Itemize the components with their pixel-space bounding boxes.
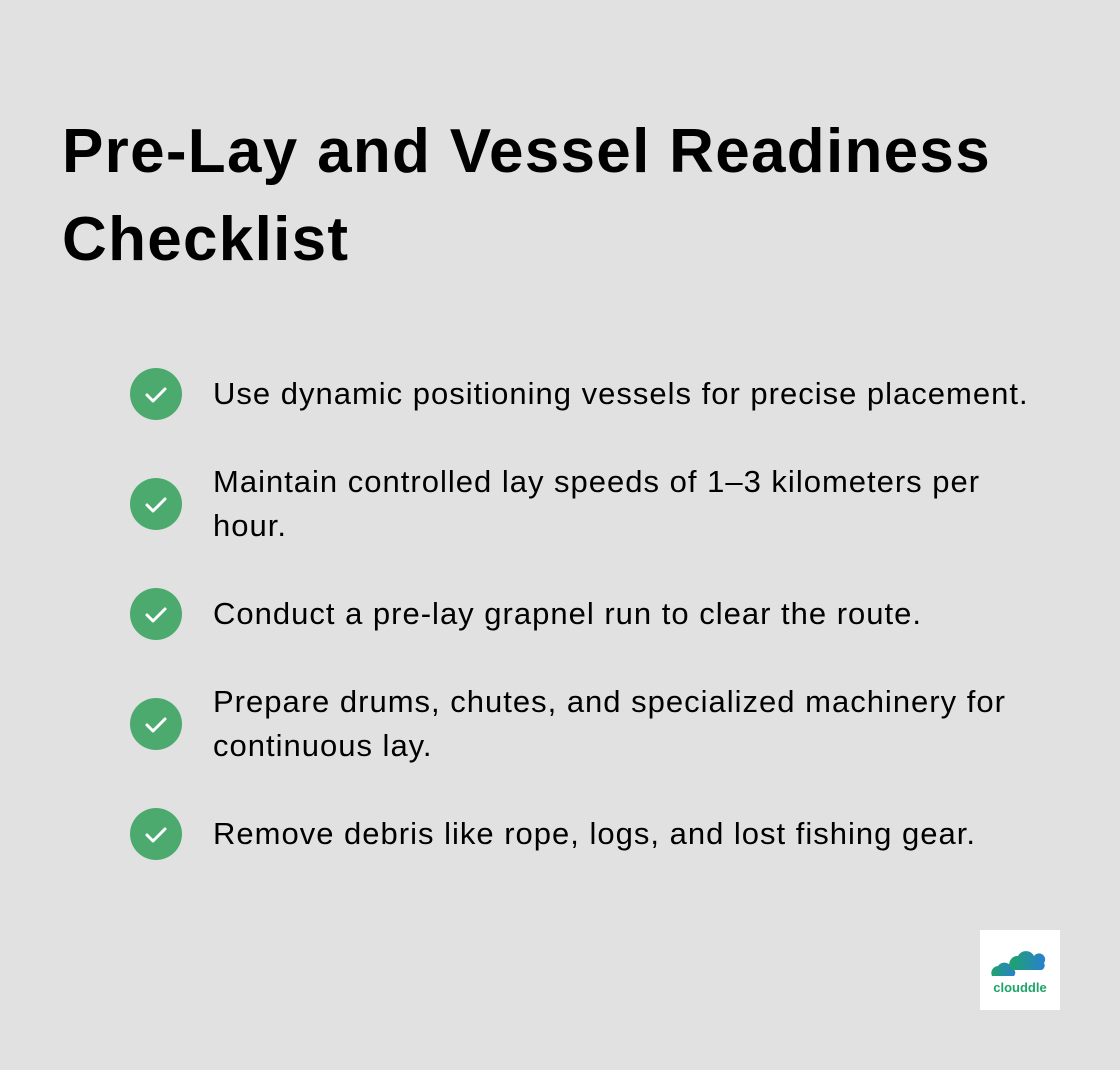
title: Pre-Lay and Vessel Readiness (62, 117, 991, 186)
icon: check (130, 478, 182, 530)
item 2: hour. (213, 508, 287, 543)
item 4: Prepare drums, chutes, and specialized machinery for (213, 684, 1006, 719)
item 1 (130, 368, 1029, 420)
logo: clouddle (993, 980, 1047, 995)
item 4 (130, 684, 1006, 763)
item 5 (130, 808, 976, 860)
logo (980, 930, 1060, 1010)
item 4: continuous lay. (213, 728, 432, 763)
item 3: Conduct a pre-lay grapnel run to clear the route. (213, 596, 922, 631)
item 5: Remove debris like rope, logs, and lost fishing gear. (213, 816, 976, 851)
item 2: Maintain controlled lay speeds of 1–3 kilometers per (213, 464, 980, 499)
item 2 (130, 464, 980, 543)
item 3 (130, 588, 922, 640)
title: Checklist (62, 205, 349, 274)
icon: check (130, 698, 182, 750)
icon: check (130, 588, 182, 640)
item 1: Use dynamic positioning vessels for precise placement. (213, 376, 1029, 411)
icon: check (130, 368, 182, 420)
icon: check (130, 808, 182, 860)
title (62, 117, 991, 274)
